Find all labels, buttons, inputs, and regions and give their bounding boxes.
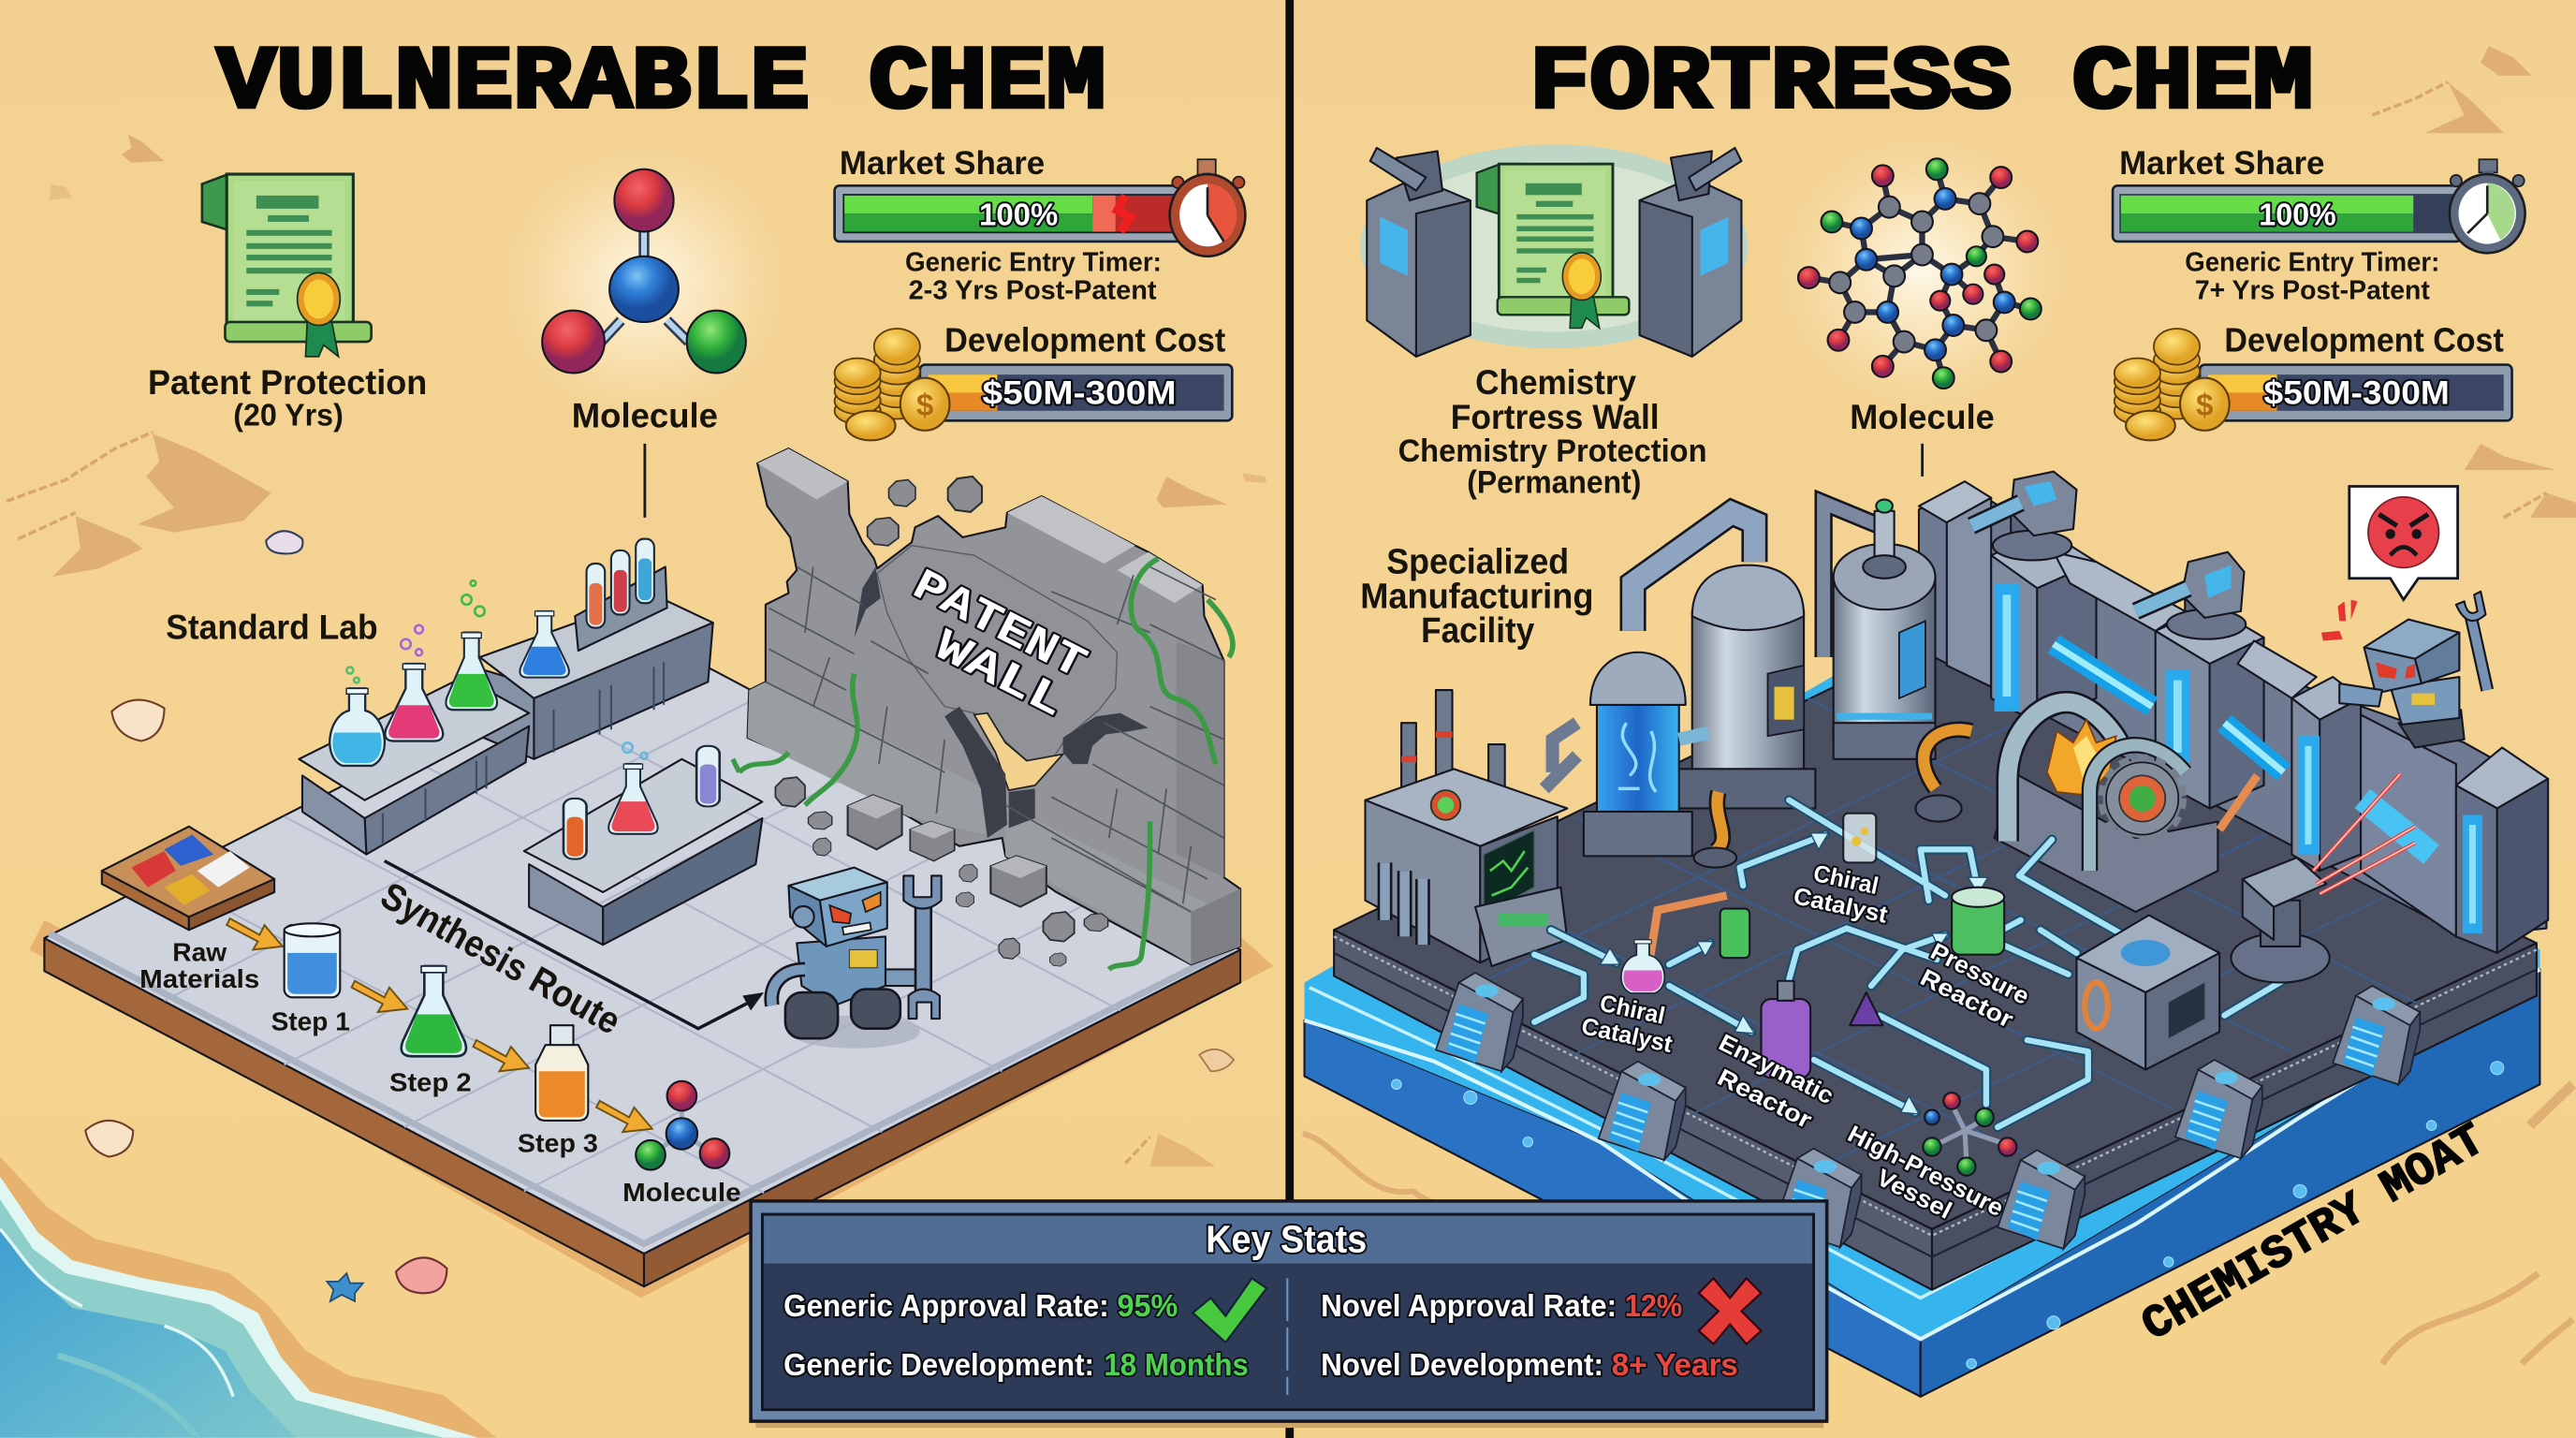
label: chemistry protection: Chemistry Protection bbox=[1398, 433, 1707, 469]
icon: cross mark bbox=[1699, 1278, 1761, 1344]
arrow: step 1 to step 2 bbox=[352, 981, 407, 1012]
robot: attacking the wall bbox=[2339, 592, 2487, 748]
anger marks bbox=[2321, 600, 2358, 640]
label: market share: Market Share bbox=[2119, 145, 2324, 182]
label: chiral catalyst lower bbox=[1579, 988, 1680, 1058]
turret: right bbox=[2136, 552, 2246, 639]
generic entry timer: 2-3 Yrs Post-Patent bbox=[909, 275, 1157, 305]
flask: red on center bench bbox=[608, 764, 658, 834]
flask: green bbox=[446, 633, 497, 710]
lab bench: back bbox=[479, 594, 713, 759]
market share value: 100% bbox=[979, 198, 1058, 232]
label: molecule: Molecule bbox=[572, 396, 718, 434]
flask: pink chiral bbox=[1621, 940, 1664, 993]
ocean and foam bbox=[0, 1157, 496, 1438]
pipe arrowheads bbox=[1600, 833, 1988, 1114]
label: step 3: Step 3 bbox=[518, 1128, 598, 1157]
sand seen through breach bbox=[974, 713, 1063, 790]
icon: final complex molecule bbox=[1923, 1093, 2016, 1176]
glowing coolant panels bbox=[1995, 583, 2482, 933]
raw materials tray bbox=[102, 827, 274, 930]
patent wall bbox=[733, 448, 1240, 969]
label: pressure reactor bbox=[1916, 938, 2033, 1034]
panel: vulnerable chem bbox=[30, 34, 1273, 1298]
label: enzymatic reactor bbox=[1713, 1030, 1837, 1134]
label: 20 years: (20 Yrs) bbox=[233, 399, 344, 433]
generic entry timer bbox=[2185, 248, 2439, 305]
robot arms bbox=[1694, 729, 1971, 868]
development cost value: $50M-300M bbox=[2264, 375, 2450, 412]
icon: step 2 flask bbox=[402, 966, 466, 1056]
title: vulnerable chem: VULNERABLE CHEM bbox=[217, 34, 1105, 134]
label: specialized manufacturing facility: Facility bbox=[1421, 610, 1534, 650]
label: specialized manufacturing facility: Specialized bbox=[1386, 542, 1569, 581]
arrow: step 3 to molecule bbox=[596, 1101, 652, 1132]
market share bar bbox=[835, 185, 1183, 242]
label: chemistry protection: (Permanent) bbox=[1467, 465, 1641, 501]
test tube rack bbox=[575, 539, 667, 651]
wall sign text: WALL bbox=[926, 623, 1072, 729]
label: chemistry moat: CHEMISTRY MOAT bbox=[2133, 1114, 2494, 1353]
control cabinet with chimneys bbox=[1365, 690, 1567, 966]
icon: green stopwatch bbox=[2450, 159, 2525, 253]
reactor: green pressure bbox=[1952, 888, 2004, 955]
label: specialized manufacturing facility bbox=[1360, 542, 1593, 650]
label: pressure reactor: Reactor bbox=[1916, 964, 2017, 1034]
vines bbox=[805, 559, 1233, 969]
stat: novel development: Novel Development: bbox=[1321, 1348, 1603, 1383]
generic entry timer: 7+ Yrs Post-Patent bbox=[2195, 275, 2430, 305]
glow: left molecule bbox=[472, 118, 816, 447]
label: pressure reactor: Pressure bbox=[1926, 938, 2033, 1010]
heading: key stats: Key Stats bbox=[1206, 1217, 1367, 1260]
flask: blue conical bbox=[520, 611, 569, 678]
glow: right molecule bbox=[1749, 107, 2095, 435]
dark cracks bbox=[855, 566, 1149, 838]
label: market share: Market Share bbox=[840, 145, 1045, 182]
stat: novel approval rate: 12% bbox=[1625, 1289, 1682, 1324]
reactor: purple enzymatic bbox=[1761, 981, 1810, 1078]
label: chiral catalyst lower: Chiral bbox=[1598, 990, 1667, 1030]
leader line bbox=[643, 444, 646, 518]
coolant pipes: outline bbox=[1534, 800, 2293, 1127]
column divider bbox=[1286, 1278, 1288, 1395]
flask: small purple bbox=[1850, 992, 1882, 1025]
orange feed pipes bbox=[1649, 775, 2258, 961]
generic entry timer bbox=[905, 248, 1162, 305]
icon: complex molecule bbox=[1798, 158, 2042, 389]
wall sign text: PATENT bbox=[904, 562, 1093, 691]
coolant pipes: fill bbox=[1534, 800, 2293, 1127]
arrow: step 2 to step 3 bbox=[473, 1040, 529, 1071]
label: chemistry protection bbox=[1398, 433, 1707, 501]
isometric lab floor bbox=[30, 633, 1273, 1298]
icon: red stopwatch bbox=[1170, 159, 1245, 257]
label: chemistry fortress wall bbox=[1451, 363, 1660, 436]
market share bar bbox=[2113, 185, 2461, 242]
flask: pink bbox=[385, 664, 443, 741]
label: step 1: Step 1 bbox=[271, 1006, 350, 1035]
label: molecule on floor: Molecule bbox=[622, 1178, 741, 1207]
robot: left bbox=[771, 868, 942, 1049]
icon: step 1 beaker bbox=[285, 923, 340, 997]
icon: fortress wall with shielded patent bbox=[1360, 144, 1748, 357]
stat: generic approval rate: 95% bbox=[1117, 1289, 1178, 1324]
equipment box: right bbox=[2076, 916, 2219, 1070]
laser turret bbox=[2231, 858, 2330, 983]
icon: gold coins bbox=[835, 329, 949, 440]
fortress outer wall bbox=[1919, 481, 2548, 953]
icon: small molecule bbox=[636, 1081, 729, 1170]
panel: fortress chem bbox=[1305, 34, 2548, 1397]
flask: blue round bbox=[329, 688, 385, 766]
silver tank: third bbox=[1823, 500, 1936, 759]
label: chiral catalyst upper bbox=[1791, 858, 1895, 929]
stat: novel approval rate: Novel Approval Rate: bbox=[1321, 1289, 1617, 1324]
icon: check mark bbox=[1193, 1278, 1266, 1343]
seashells and starfish bbox=[85, 531, 1234, 1301]
label: enzymatic reactor: Enzymatic bbox=[1715, 1030, 1837, 1109]
arrow: raw to step 1 bbox=[227, 918, 283, 949]
label: chemistry fortress wall: Chemistry bbox=[1475, 363, 1637, 402]
icon: simple molecule bbox=[542, 169, 746, 373]
turret: left bbox=[1971, 472, 2076, 560]
wall plate bbox=[877, 546, 1117, 761]
label: molecule: Molecule bbox=[1850, 398, 1995, 436]
rubble bbox=[775, 477, 1108, 966]
label: step 2: Step 2 bbox=[389, 1067, 472, 1096]
lab bench: center bbox=[524, 759, 762, 945]
icon: gold coins bbox=[2115, 329, 2230, 440]
label: raw materials: Raw bbox=[172, 938, 227, 967]
stat: generic approval rate: Generic Approval Rate: bbox=[783, 1289, 1109, 1324]
label: patent protection: Patent Protection bbox=[148, 363, 427, 402]
leader line bbox=[1921, 444, 1924, 477]
label: development cost: Development Cost bbox=[944, 321, 1225, 360]
laser beams bbox=[2313, 774, 2415, 894]
title: fortress chem: FORTRESS CHEM bbox=[1530, 34, 2313, 134]
stat: generic development: Generic Development: bbox=[783, 1348, 1094, 1383]
stat: generic development: 18 Months bbox=[1104, 1348, 1249, 1383]
label: enzymatic reactor: Reactor bbox=[1713, 1064, 1816, 1134]
blue glass reactor tank bbox=[1544, 653, 1708, 856]
center divider bbox=[1285, 0, 1294, 1438]
factory platform bbox=[1334, 642, 2537, 1290]
development cost value: $50M-300M bbox=[983, 375, 1177, 412]
market share value: 100% bbox=[2259, 198, 2336, 232]
speech bubble with angry face bbox=[2349, 486, 2458, 600]
label: chiral catalyst upper: Chiral bbox=[1811, 860, 1881, 900]
label: high-pressure vessel: High-Pressure bbox=[1843, 1121, 2008, 1222]
generic entry timer: Generic Entry Timer: bbox=[2185, 248, 2439, 278]
sluice gates bbox=[1436, 973, 2420, 1249]
wall sign text bbox=[904, 562, 1093, 729]
synthesis route arrow bbox=[385, 861, 764, 1029]
tube: purple bbox=[696, 746, 720, 806]
label: raw materials bbox=[139, 938, 259, 993]
bubbles bbox=[346, 580, 648, 759]
label: chiral catalyst lower: Catalyst bbox=[1579, 1013, 1675, 1058]
gear reactor machine bbox=[1995, 702, 2217, 912]
label: high-pressure vessel: Vessel bbox=[1872, 1165, 1955, 1225]
vial: green catalyst bbox=[1720, 909, 1749, 958]
chemistry moat bbox=[1305, 624, 2539, 1397]
label: chiral catalyst upper: Catalyst bbox=[1791, 883, 1890, 929]
icon: step 3 bottle bbox=[535, 1025, 588, 1121]
tube: orange bbox=[564, 799, 587, 859]
label: chemistry fortress wall: Fortress Wall bbox=[1451, 398, 1660, 436]
header band bbox=[764, 1216, 1812, 1264]
label: standard lab: Standard Lab bbox=[166, 609, 378, 647]
development cost bar bbox=[2200, 365, 2512, 420]
label: synthesis route: Synthesis Route bbox=[373, 873, 628, 1043]
label: raw materials: Materials bbox=[139, 964, 259, 993]
generic entry timer: Generic Entry Timer: bbox=[905, 248, 1162, 278]
lab bench: left bbox=[299, 677, 529, 855]
panel: key stats bbox=[751, 1201, 1827, 1428]
icon: patent scroll bbox=[202, 174, 372, 357]
development cost bar bbox=[920, 365, 1232, 420]
beaker: chiral catalyst bbox=[1843, 814, 1876, 862]
stat: novel development: 8+ Years bbox=[1612, 1348, 1738, 1383]
label: development cost: Development Cost bbox=[2224, 321, 2504, 360]
label: specialized manufacturing facility: Manufacturing bbox=[1360, 576, 1593, 615]
silver tank: domed bbox=[1633, 513, 1815, 808]
